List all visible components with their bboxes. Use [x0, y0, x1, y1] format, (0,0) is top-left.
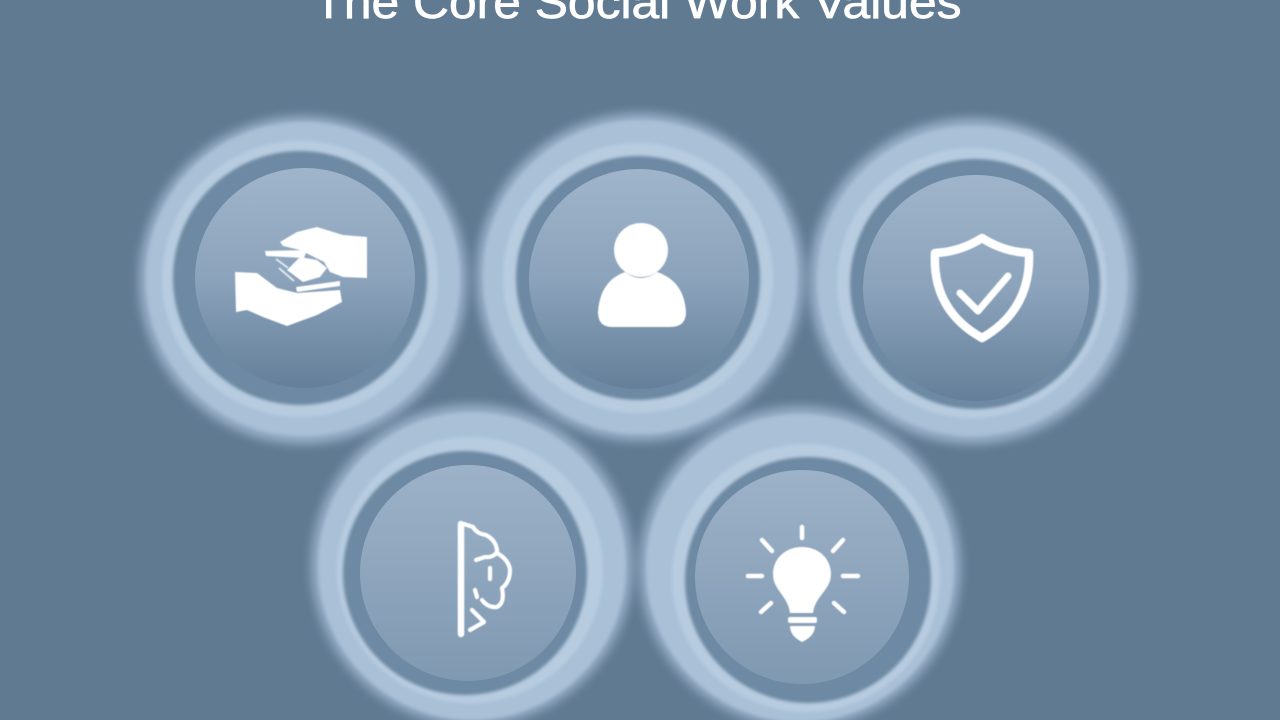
value circle: bottom right, competence	[639, 406, 961, 720]
icon: half brain	[461, 524, 510, 634]
icon: person	[598, 223, 686, 327]
value circle: top right, social justice	[809, 118, 1135, 444]
value circle: bottom left, integrity	[311, 404, 633, 720]
icon: shield with check	[935, 238, 1029, 338]
value circle: top left, service	[139, 116, 467, 444]
value circle: top center, dignity of the person	[476, 113, 804, 441]
icon: light bulb	[748, 527, 858, 642]
icon: giving hands	[235, 227, 367, 326]
